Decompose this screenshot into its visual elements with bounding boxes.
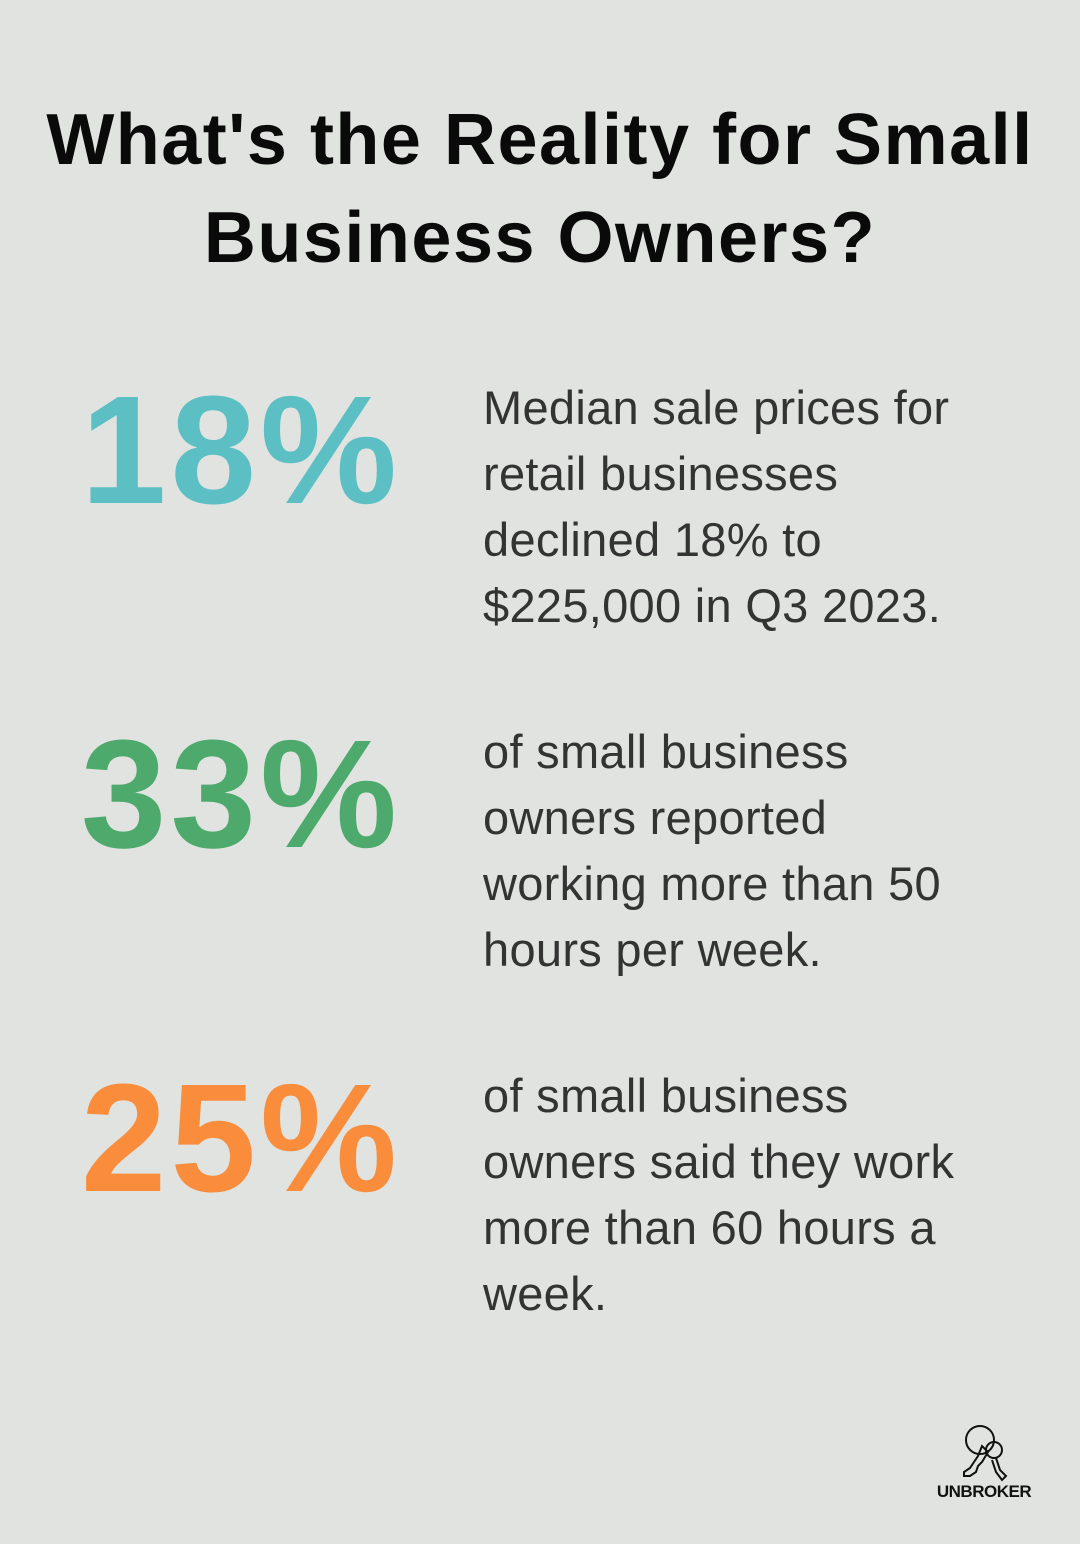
text block 1: $225,000 in Q3 2023. [483,579,941,632]
stat: 25% [81,1052,954,1320]
text block 1: retail businesses [483,447,838,500]
logo text: UNBROKER [937,1482,1031,1501]
logo: unbroker [937,1425,1032,1501]
title: What's the Reality for Small [46,100,1034,180]
text block 3 [483,1069,954,1320]
icon: keys [963,1425,1008,1482]
text block 1: declined 18% to [483,513,822,566]
text block 1: Median sale prices for [483,381,949,434]
stat: 18% [81,364,949,632]
text block 3: of small business [483,1069,849,1122]
title: Business Owners? [204,198,876,278]
text block 3: week. [483,1267,607,1320]
text block 3: owners said they work [483,1135,954,1188]
number 25%: 25% [81,1052,401,1224]
text block 2: hours per week. [483,923,822,976]
number 33%: 33% [81,708,401,880]
text block 2: of small business [483,725,849,778]
number 18%: 18% [81,364,401,536]
text block 2 [483,725,941,976]
text block 1 [483,381,949,632]
text block 2: working more than 50 [483,857,941,910]
title [46,100,1034,278]
stat: 33% [81,708,941,976]
text block 2: owners reported [483,791,827,844]
text block 3: more than 60 hours a [483,1201,936,1254]
